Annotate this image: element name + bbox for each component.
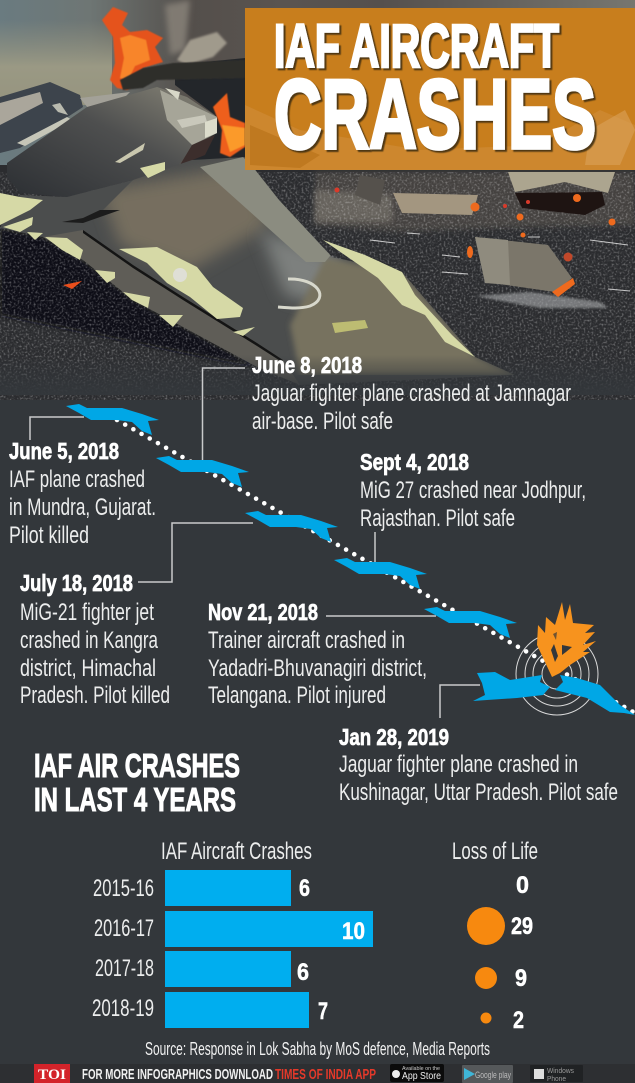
lower wing panel <box>0 157 515 385</box>
left wing fragment <box>0 82 130 153</box>
footer bar <box>0 1064 635 1083</box>
bar: 2015-16 <box>93 870 310 906</box>
event: June 5, 2018: June 5, 2018 <box>9 438 119 464</box>
bar: 2017-18 <box>95 951 309 987</box>
event: Nov 21, 2018: Telangana. Pilot injured <box>208 682 386 709</box>
bar: 2016-17: 10 <box>342 918 365 945</box>
icon: explosion <box>537 602 596 677</box>
event: Nov 21, 2018 <box>208 599 427 709</box>
bar: 2017-18: 2017-18 <box>95 955 154 982</box>
bar: 2015-16: 6 <box>299 875 310 902</box>
icon: plane 2 <box>156 456 249 487</box>
event: June 5, 2018: Pilot killed <box>9 522 89 549</box>
bar: 2018-19: 2018-19 <box>92 995 154 1022</box>
TOI logo <box>34 1064 70 1083</box>
chart header: IAF Aircraft Crashes <box>161 838 312 865</box>
icon: plane 1 <box>66 404 159 435</box>
timeline: dotted flight path <box>117 420 635 713</box>
flame: main <box>102 7 163 90</box>
event: June 8, 2018: air-base. Pilot safe <box>252 408 393 435</box>
leader line: July 18 <box>138 523 253 582</box>
event: Nov 21, 2018: Trainer aircraft crashed in <box>208 627 405 654</box>
icon: plane 5 <box>424 607 517 638</box>
bubble: 9: 9 <box>515 965 527 992</box>
leader line: Jan 28 <box>440 685 480 718</box>
badge: Windows Phone <box>530 1065 583 1083</box>
event: Sept 4, 2018 <box>360 449 586 532</box>
bar: 2018-19 <box>92 992 328 1028</box>
bar: 2015-16: 2015-16 <box>93 875 154 902</box>
event: July 18, 2018 <box>20 570 170 709</box>
event: Nov 21, 2018: Yadadri-Bhuvanagiri district, <box>208 655 427 682</box>
bar: 2017-18: 6 <box>297 959 309 986</box>
event: July 18, 2018: district, Himachal <box>20 655 156 682</box>
title banner <box>245 8 635 170</box>
event: Nov 21, 2018: Nov 21, 2018 <box>208 599 318 625</box>
sky and smoke <box>0 0 635 175</box>
bubble: 2 <box>480 1007 524 1034</box>
TOI logo: TOI <box>38 1067 66 1083</box>
badge: Google Play <box>462 1065 513 1083</box>
upper wing panel <box>7 87 217 197</box>
icon: plane 3 <box>245 511 338 542</box>
event: July 18, 2018: MiG-21 fighter jet <box>20 599 154 626</box>
heading: crashes in last 4 years <box>34 747 240 818</box>
bubble chart: loss of life <box>452 838 538 1034</box>
badge: App Store <box>390 1064 444 1082</box>
badge: Windows Phone: Phone <box>547 1076 566 1083</box>
smoke-dark wreck behind wing <box>175 58 245 175</box>
roundel crescent <box>278 279 320 308</box>
footer message: FOR MORE INFOGRAPHICS DOWNLOAD <box>82 1066 273 1083</box>
bubble: 29: 29 <box>511 913 533 940</box>
icon: crashed plane, front half <box>473 672 550 701</box>
debris <box>334 172 616 297</box>
badge: App Store: App Store <box>402 1071 441 1082</box>
icon: plane 4 <box>334 558 427 589</box>
value: 0: 0 <box>516 872 529 899</box>
rock in smoke <box>177 32 227 65</box>
heading: crashes in last 4 years: IAF AIR CRASHES <box>34 747 240 784</box>
event: July 18, 2018: Pradesh. Pilot killed <box>20 682 170 709</box>
event: Jan 28, 2019: Jan 28, 2019 <box>339 724 449 750</box>
event: July 18, 2018: July 18, 2018 <box>20 570 133 596</box>
badge: Windows Phone: Windows <box>547 1068 574 1075</box>
event: June 8, 2018 <box>252 352 571 435</box>
bar: 2016-17: 2016-17 <box>94 915 154 942</box>
event: June 5, 2018: IAF plane crashed <box>9 466 145 493</box>
event: July 18, 2018: crashed in Kangra <box>20 627 158 654</box>
bar: 2016-17 <box>94 911 373 947</box>
bubble: 29 <box>467 907 533 945</box>
crash target rings <box>516 633 598 715</box>
flame: right of wing <box>213 93 245 157</box>
bar chart: IAF aircraft crashes <box>92 838 373 1028</box>
ground <box>0 165 635 400</box>
event: June 8, 2018: June 8, 2018 <box>252 352 362 378</box>
heading: crashes in last 4 years: IN LAST 4 YEARS <box>34 781 236 818</box>
wing paint patches <box>0 143 475 357</box>
charred branch <box>120 60 245 90</box>
badge: App Store: Available on the <box>402 1066 440 1072</box>
event: Sept 4, 2018: Sept 4, 2018 <box>360 449 469 475</box>
leader line: June 5 <box>30 417 84 440</box>
chart header: Loss of Life <box>452 838 538 865</box>
icon: crashed plane, rear half <box>555 675 635 715</box>
footer app name: TIMES OF INDIA APP <box>275 1066 376 1083</box>
photo: burning aircraft wreckage <box>0 0 635 400</box>
leader line: Nov 21 <box>326 615 436 617</box>
event: June 5, 2018 <box>9 438 156 549</box>
event: June 5, 2018: in Mundra, Gujarat. <box>9 494 156 521</box>
bubble: 2: 2 <box>513 1007 524 1034</box>
leader line: June 8 <box>202 368 245 460</box>
event: Sept 4, 2018: Rajasthan. Pilot safe <box>360 505 515 532</box>
badge: Google Play: Google play <box>475 1070 511 1080</box>
event: Jan 28, 2019 <box>339 724 618 806</box>
bubble: 9 <box>475 965 527 992</box>
ember on ground <box>63 281 82 289</box>
bar: 2018-19: 7 <box>318 998 328 1025</box>
wing crease strip <box>43 230 300 385</box>
leader line: Sept 4 <box>374 532 376 562</box>
